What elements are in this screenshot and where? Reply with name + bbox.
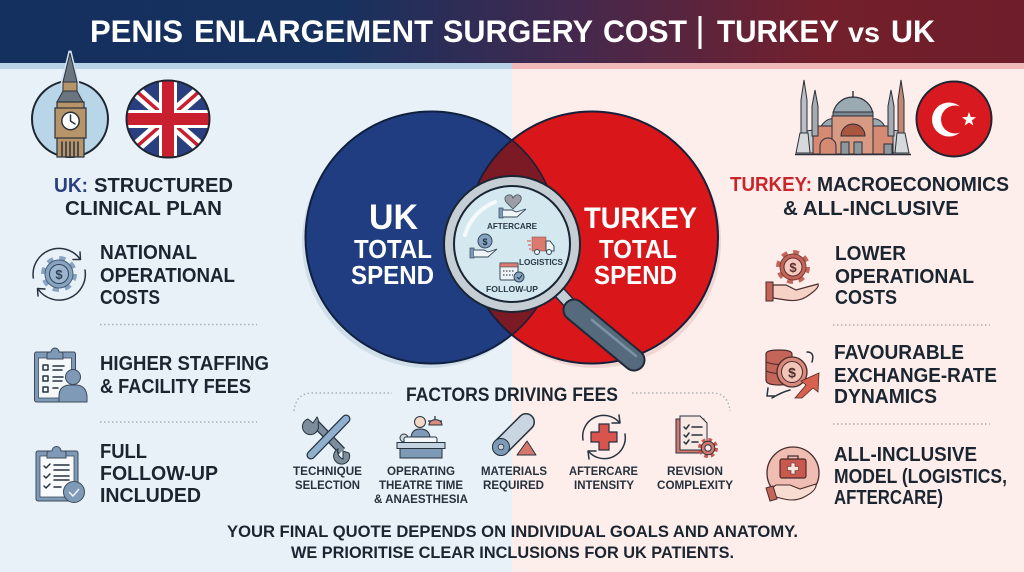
- factor: operating theatre: & ANAESTHESIA: [374, 492, 468, 506]
- heading: UK structured clinical plan: STRUCTURED: [94, 174, 233, 197]
- title: UK: [891, 13, 935, 49]
- icon: gear with dollar: [33, 248, 85, 300]
- title: TURKEY: [717, 13, 839, 49]
- icon: coins and rising arrow: [766, 350, 819, 398]
- cost mini icon: [470, 234, 497, 258]
- heading: Turkey macroeconomics and all-inclusive: & ALL-INCLUSIVE: [783, 197, 959, 220]
- footer note: WE PRIORITISE CLEAR INCLUSIONS FOR UK PATIENTS.: [291, 543, 734, 562]
- text: favourable exchange-rate dynamics: [834, 342, 997, 408]
- chart: Venn diagram: [302, 112, 721, 368]
- text: all-inclusive model: ALL-INCLUSIVE: [834, 444, 977, 466]
- aftercare mini icon: [487, 195, 537, 231]
- footer note: YOUR FINAL QUOTE DEPENDS ON INDIVIDUAL GOALS AND ANATOMY.: [227, 522, 798, 541]
- header band: [0, 0, 1024, 69]
- factor: aftercare intensity: AFTERCARE: [569, 464, 638, 478]
- text: full follow-up included: [100, 441, 218, 507]
- factor: operating theatre: OPERATING: [387, 464, 455, 478]
- text: lower operational costs: LOWER: [835, 243, 907, 265]
- factor: technique selection: TECHNIQUE: [293, 464, 362, 478]
- title: SURGERY: [443, 13, 593, 49]
- follow-up mini icon: [486, 263, 538, 294]
- text: national operational costs: NATIONAL: [100, 242, 197, 264]
- background: UK side: [0, 68, 512, 572]
- text: full follow-up included: FOLLOW-UP: [100, 463, 218, 485]
- panel: UK side: [32, 51, 269, 507]
- icon: gear with dollar: $: [55, 267, 63, 282]
- factor: operating theatre: [374, 416, 468, 506]
- icon: UK flag: [126, 80, 210, 158]
- icon: medical case over hand: [766, 447, 819, 501]
- icon: Turkish flag: [916, 82, 992, 156]
- text: higher staffing and facility fees: [100, 353, 269, 398]
- heading: Turkey macroeconomics and all-inclusive: MACROECONOMICS: [817, 173, 1009, 196]
- Turkey total spend label: TURKEY: [584, 202, 697, 235]
- UK total spend label: [351, 198, 434, 290]
- icon: gear over hand: $: [789, 260, 797, 275]
- factor: materials required: [481, 422, 547, 492]
- text: favourable exchange-rate dynamics: EXCHANGE-RATE: [834, 365, 997, 387]
- UK total spend label: UK: [369, 198, 418, 237]
- icon: mosque: [795, 80, 911, 154]
- title: PENIS: [90, 13, 183, 49]
- text: lower operational costs: OPERATIONAL: [835, 266, 974, 288]
- text: full follow-up included: INCLUDED: [100, 485, 201, 507]
- heading: UK structured clinical plan: CLINICAL PLAN: [65, 197, 222, 220]
- logistics mini icon: LOGISTICS: [519, 257, 563, 267]
- panel: Turkey side: [730, 80, 1009, 509]
- Turkey total spend label: [584, 202, 697, 290]
- icon: clipboard with check badge: [36, 446, 84, 502]
- factor: aftercare intensity: INTENSITY: [574, 478, 634, 492]
- text: national operational costs: [100, 242, 235, 309]
- title: ENLARGEMENT: [194, 13, 433, 49]
- text: lower operational costs: COSTS: [835, 287, 897, 309]
- text: all-inclusive model: AFTERCARE): [834, 487, 943, 509]
- factor: aftercare intensity: [569, 415, 638, 492]
- factor: materials required: MATERIALS: [481, 464, 547, 478]
- aftercare mini icon: AFTERCARE: [487, 221, 537, 231]
- heading: Turkey macroeconomics and all-inclusive: TURKEY:: [730, 173, 812, 196]
- follow-up mini icon: FOLLOW-UP: [486, 284, 538, 294]
- heading: UK structured clinical plan: [54, 174, 233, 220]
- footer note: [227, 522, 798, 562]
- title: vs: [848, 17, 880, 48]
- factor: revision complexity: REVISION: [667, 464, 723, 478]
- factor: revision complexity: [657, 416, 733, 492]
- UK total spend label: SPEND: [351, 260, 434, 290]
- text: national operational costs: COSTS: [100, 287, 160, 309]
- factor: materials required: REQUIRED: [483, 478, 544, 492]
- panel: factors driving fees: [293, 385, 733, 506]
- factor: operating theatre: THEATRE TIME: [379, 478, 463, 492]
- logistics mini icon: [519, 237, 563, 267]
- heading: Turkey macroeconomics and all-inclusive: [730, 173, 1009, 220]
- factor: technique selection: SELECTION: [295, 478, 360, 492]
- UK circle: [306, 112, 558, 364]
- text: higher staffing and facility fees: HIGHER STAFFING: [100, 353, 269, 375]
- text: higher staffing and facility fees: & FACILITY FEES: [100, 376, 251, 398]
- text: full follow-up included: FULL: [100, 441, 147, 463]
- UK total spend label: TOTAL: [354, 234, 432, 264]
- heading: factors driving fees: FACTORS DRIVING FEES: [406, 385, 618, 406]
- factor: revision complexity: COMPLEXITY: [657, 478, 733, 492]
- Turkey total spend label: SPEND: [594, 260, 677, 290]
- background: Turkey side: [512, 68, 1024, 572]
- text: favourable exchange-rate dynamics: DYNAMICS: [834, 386, 937, 408]
- icon: clipboard with person: [34, 348, 87, 402]
- Turkey total spend label: TOTAL: [599, 234, 677, 264]
- text: all-inclusive model: [834, 444, 1007, 509]
- title: COST: [603, 13, 687, 49]
- Turkey circle: [466, 112, 718, 364]
- text: lower operational costs: [835, 243, 974, 309]
- icon: Big Ben: [32, 51, 108, 157]
- text: favourable exchange-rate dynamics: FAVOURABLE: [834, 342, 964, 364]
- cost mini icon: $: [482, 237, 488, 247]
- overlap: [479, 142, 545, 334]
- heading: UK structured clinical plan: UK:: [54, 174, 88, 197]
- icon: magnifying glass: [444, 176, 636, 360]
- factor: technique selection: [293, 417, 362, 492]
- text: national operational costs: OPERATIONAL: [100, 265, 235, 287]
- icon: gear over hand: [766, 253, 818, 301]
- title: [90, 13, 935, 49]
- icon: coins and rising arrow: $: [788, 364, 796, 380]
